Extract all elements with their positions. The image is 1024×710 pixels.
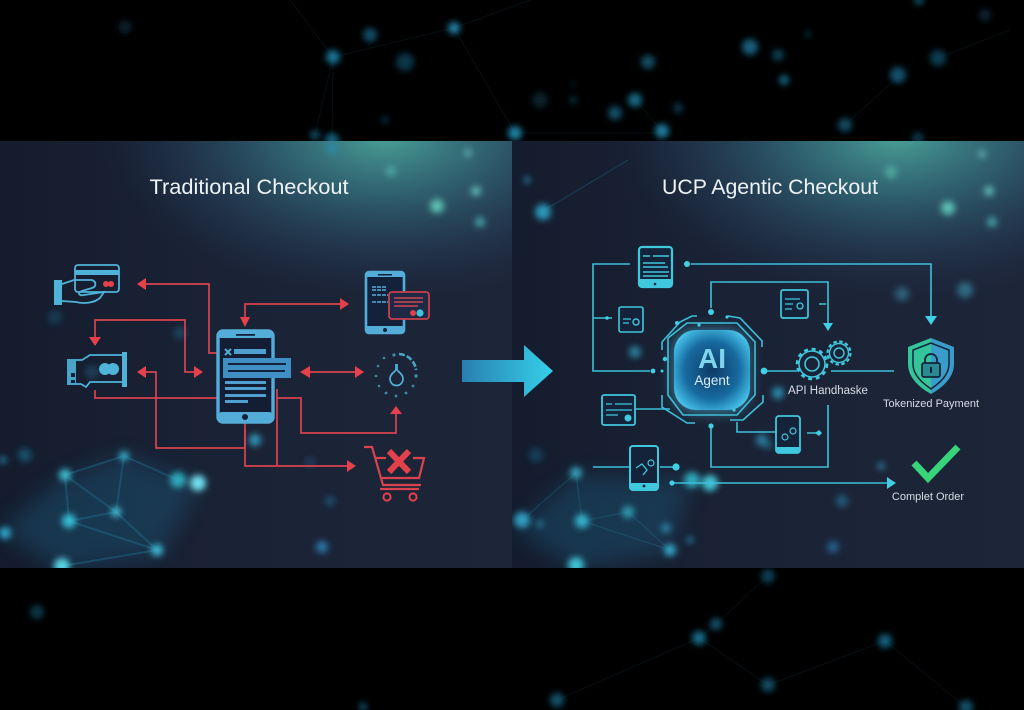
icon: shopping cart with red X [364, 447, 424, 501]
icon: central smartphone with checkout form [218, 331, 291, 422]
icon: phone with payment [630, 446, 658, 490]
arrow: transition between panels [462, 345, 553, 397]
icon: document tablet top [639, 247, 672, 287]
label: API Handhaske: API Handhaske [788, 385, 868, 397]
label: AI: AI [698, 343, 726, 374]
icon: loading timer [375, 353, 418, 397]
icon: small tablet top right [781, 290, 808, 318]
arrows: traditional checkout red connectors [89, 278, 402, 472]
icon: smartphone with payment card [366, 272, 429, 333]
icon: document card left [602, 395, 635, 425]
icon: green check mark [914, 447, 958, 478]
heading: Traditional Checkout: Traditional Checkout [150, 176, 349, 199]
icon: tokenized payment shield [908, 338, 954, 394]
icon: gears API handshake [797, 342, 850, 379]
panel: UCP agentic checkout [512, 141, 1024, 568]
arrows: agentic checkout connectors [593, 261, 937, 489]
icon: tablet with gears [776, 416, 800, 453]
heading: UCP Agentic Checkout: UCP Agentic Checkout [662, 176, 878, 199]
panel: traditional checkout [0, 141, 512, 568]
label: Agent: Agent [694, 373, 730, 388]
icon: AI agent chip [662, 315, 763, 423]
label: Tokenized Payment: Tokenized Payment [883, 398, 979, 410]
icon: small card window [619, 307, 643, 332]
icon: hand holding credit card [54, 265, 119, 305]
label: Complet Order: Complet Order [892, 491, 964, 503]
icon: payment terminal hand [67, 352, 127, 387]
